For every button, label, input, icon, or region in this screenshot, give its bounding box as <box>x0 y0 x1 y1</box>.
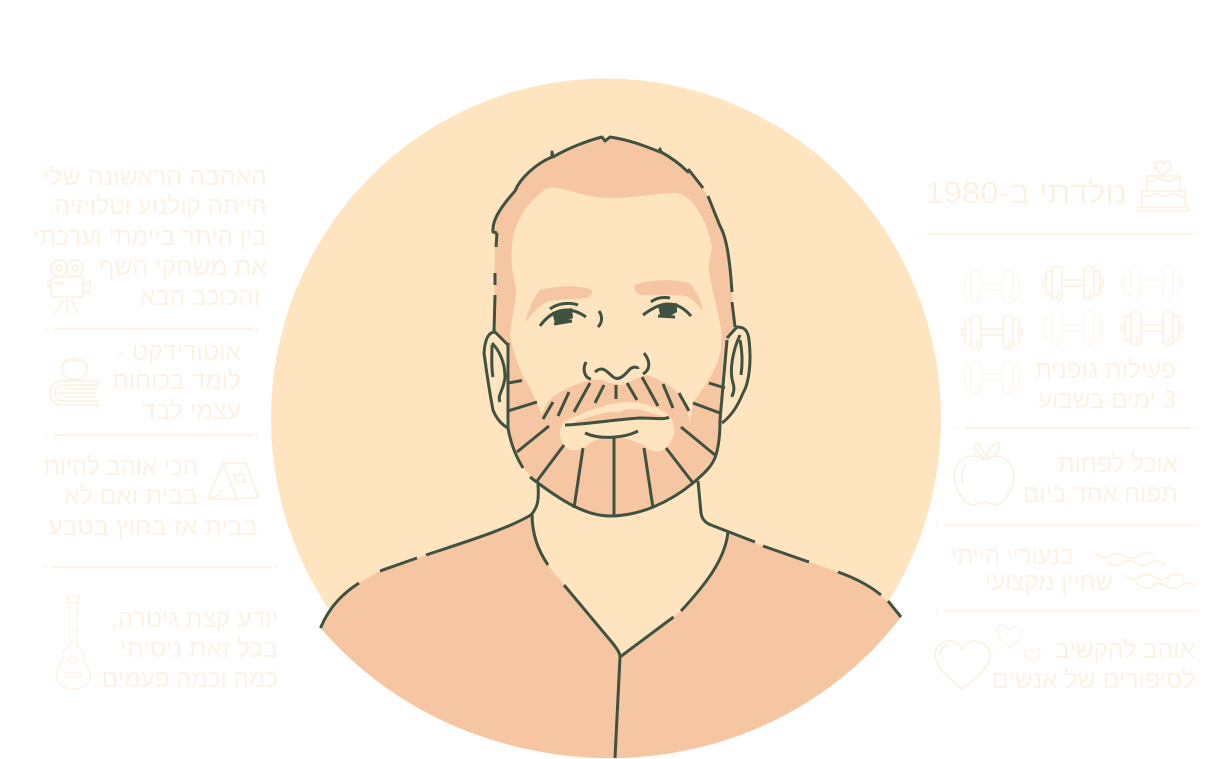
icon: film camera <box>48 260 90 313</box>
mouth <box>565 417 669 437</box>
left text: autodidact <box>112 338 241 425</box>
left ear <box>484 332 508 428</box>
nose bridge line <box>598 311 602 327</box>
left eyebrow <box>525 286 592 322</box>
left text: first love: והכוכב הבא <box>140 283 260 311</box>
left text: guitar: יודע קצת גיטרה, <box>111 605 278 633</box>
left text: outdoors <box>43 453 258 541</box>
left text: first love: האהבה הראשונה שלי <box>43 163 267 191</box>
birth year: נולדתי ב-1980 <box>925 175 1127 210</box>
left text: outdoors: בבית אז בחוץ בטבע <box>48 513 258 541</box>
portrait illustration <box>320 137 901 758</box>
right eyebrow <box>634 280 703 312</box>
right text: exercise: 3 ימים בשבוע <box>1038 386 1176 414</box>
right text: swimmer <box>951 542 1113 596</box>
left text: outdoors: בבית ואם לא <box>64 482 198 510</box>
right text: exercise: פעילות גופנית <box>1035 356 1176 384</box>
icon: waves <box>1095 553 1195 588</box>
icon: tent <box>208 463 258 499</box>
mustache strokes <box>543 377 689 419</box>
icon: apple <box>954 443 1014 505</box>
left text: first love: בין היתר ביימתי וערכתי <box>33 223 267 251</box>
icon: ukulele <box>57 596 90 689</box>
icon: apple on books <box>50 356 98 405</box>
right eye <box>643 297 691 317</box>
right text: swimmer: בנעוריי הייתי <box>951 542 1074 570</box>
left eye <box>540 303 586 326</box>
lips area <box>560 402 674 451</box>
beard strokes <box>508 380 725 515</box>
left text: first love: את משחקי השף <box>99 253 267 281</box>
background circle <box>271 78 941 758</box>
left text: outdoors: הכי אוהב להיות <box>43 453 198 481</box>
face skin <box>510 188 721 424</box>
neck and shoulders outline <box>320 481 901 628</box>
icon: dumbbells <box>962 266 1182 394</box>
icon: hearts <box>935 625 1040 689</box>
left text: first love: הייתה קולנוע וטלויזיה, <box>48 192 267 220</box>
jaw and beard line <box>508 340 727 516</box>
left text: autodidact: לומד בכוחות <box>112 367 241 395</box>
upper lip <box>573 409 668 423</box>
left text: guitar <box>102 605 278 693</box>
shirt <box>320 513 901 758</box>
right text: apple a day <box>1023 450 1178 508</box>
right text: swimmer: שחיין מקצועי <box>985 568 1113 596</box>
left text: guitar: כמה וכמה פעמים <box>102 665 278 693</box>
left text: autodidact: עצמי לבד <box>142 397 241 425</box>
left text: first love <box>33 163 267 311</box>
right text: apple a day: תפוח אחד ביום <box>1023 480 1178 508</box>
head outline <box>493 137 735 332</box>
left text: guitar: בכל זאת ניסיתי <box>120 635 278 663</box>
icon: cake <box>1138 161 1188 211</box>
head hair and beard shading <box>493 137 735 516</box>
right text: stories <box>992 636 1195 694</box>
nose <box>584 353 649 379</box>
right text: exercise <box>1035 356 1176 414</box>
right text: stories: לסיפורים של אנשים <box>992 666 1195 694</box>
collar <box>532 513 728 758</box>
right text: stories: אוהב להקשיב <box>1055 636 1195 664</box>
right ear <box>722 327 750 423</box>
left text: autodidact: אוטודידקט - <box>117 338 241 366</box>
right text: apple a day: אוכל לפחות <box>1058 450 1178 478</box>
